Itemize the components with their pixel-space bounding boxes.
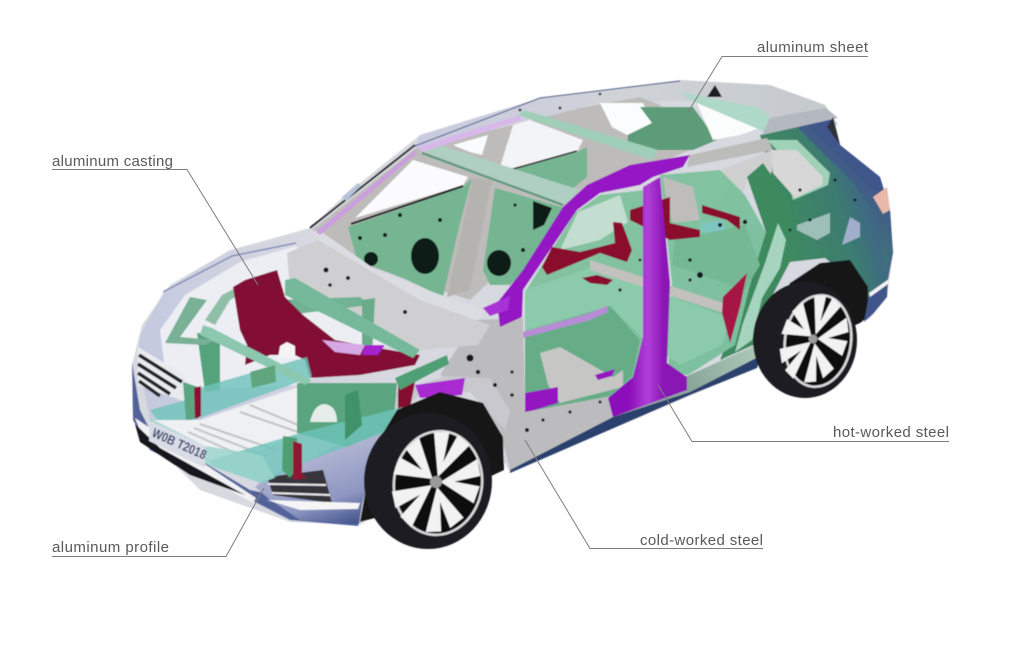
rear aluminum sheet strip — [680, 92, 782, 132]
label: cold-worked steel — [525, 440, 763, 549]
purple floor strip — [595, 369, 615, 380]
lower grille — [267, 470, 332, 503]
window slot — [533, 201, 552, 230]
white arch in frame — [310, 404, 337, 422]
white notch under casting — [278, 342, 295, 358]
rear side window interior — [770, 150, 823, 198]
cross member — [590, 260, 733, 316]
label: hot-worked steel: hot-worked steel — [833, 424, 949, 441]
label: aluminum profile — [52, 488, 264, 556]
c pillar — [722, 163, 793, 360]
lower beam — [210, 407, 403, 483]
far roof pale purple — [418, 115, 522, 152]
front hub — [430, 476, 442, 488]
purple patch at hinge — [483, 296, 510, 316]
rear side panel pale — [797, 213, 830, 240]
rear rim — [779, 291, 857, 391]
taillight — [873, 187, 890, 214]
far a pillar gray — [312, 97, 690, 300]
top cross bracket — [275, 297, 370, 316]
purple hot-worked steel — [316, 115, 690, 417]
front wheel — [360, 392, 504, 550]
b pillar — [608, 177, 687, 417]
body silhouette — [132, 80, 893, 525]
red in front well — [398, 382, 415, 412]
plate body — [149, 421, 205, 468]
c pillar highlight — [735, 223, 786, 352]
label: aluminum casting — [52, 153, 258, 285]
roof cross beam — [518, 110, 658, 160]
a pillar and roof rail — [497, 155, 690, 327]
far mirror — [342, 183, 361, 201]
front tunnel gray — [540, 347, 623, 403]
rear spokes — [764, 284, 863, 396]
cabin floor — [523, 170, 766, 413]
front rim — [387, 425, 489, 541]
bumper lower blue — [132, 362, 362, 526]
bumper bracket — [282, 436, 297, 478]
speaker hole small — [364, 252, 378, 266]
small far triangle window — [453, 135, 488, 155]
central front frame — [297, 383, 397, 447]
cross beam to grille — [200, 325, 312, 385]
gray rear roof rail — [687, 138, 773, 167]
label: aluminum sheet: aluminum sheet — [757, 39, 869, 56]
rear body green — [720, 117, 893, 360]
car illustration — [132, 80, 893, 550]
bumper bracket red — [293, 441, 307, 480]
header beam green edge — [422, 153, 563, 205]
floor ahead of b pillar — [525, 190, 648, 412]
purple behind engine — [322, 340, 365, 355]
far side structure — [312, 92, 782, 300]
far a pillar pale purple — [316, 150, 417, 235]
body hole dots — [324, 93, 856, 432]
upper bumper beam — [150, 357, 312, 420]
rear side window trim — [767, 140, 830, 200]
fender wheel surround — [390, 376, 510, 430]
arc to tower — [205, 278, 258, 325]
front green beams — [183, 278, 449, 480]
front tire — [364, 413, 492, 549]
green engine structures — [165, 278, 397, 447]
front face white chrome — [150, 385, 305, 460]
bumper white lip — [135, 418, 256, 503]
red engine casting — [233, 270, 420, 378]
speaker hole front door — [411, 238, 439, 274]
floor behind b pillar — [660, 170, 766, 375]
front bumper and fascia — [132, 347, 403, 526]
arch interior pale — [560, 195, 628, 250]
chrome stripes — [188, 405, 298, 462]
red mid casting — [542, 222, 632, 275]
strut right leg — [362, 298, 375, 358]
hood transparent panel — [138, 232, 470, 420]
left end beam — [150, 418, 275, 483]
far door front panel — [348, 178, 472, 297]
bumper black lip — [135, 424, 245, 495]
strip purple on footwell — [523, 306, 608, 338]
hood interior glass — [160, 246, 400, 390]
main diagonal beam — [285, 278, 420, 358]
grille — [138, 347, 186, 402]
label: aluminum profile: aluminum profile — [52, 539, 169, 556]
windshield edge dark — [310, 145, 415, 228]
left upright — [197, 333, 220, 392]
red rear tower — [702, 205, 740, 230]
chrome lip — [267, 500, 360, 510]
lower grille bars — [268, 484, 330, 495]
red aluminum casting rear — [542, 197, 747, 343]
label: hot-worked steel — [658, 385, 949, 442]
rear roof end — [762, 108, 838, 135]
purple floor plate — [525, 387, 558, 413]
far door top seal — [351, 186, 463, 224]
rear spoiler — [827, 117, 840, 145]
label: cold-worked steel: cold-worked steel — [640, 532, 763, 549]
far door rear panel — [483, 188, 565, 285]
sill strip — [612, 342, 763, 417]
rear wheel arch — [765, 260, 868, 350]
rear roof opening — [697, 103, 763, 140]
rear hub — [808, 334, 818, 344]
sill underside — [510, 355, 762, 473]
seat back gray — [663, 177, 700, 223]
label: aluminum sheet — [688, 39, 869, 112]
red right bracket — [722, 273, 747, 343]
roof antenna — [707, 85, 722, 97]
windshield header beam — [420, 143, 580, 204]
far windshield opening — [355, 160, 468, 218]
front side gray panel — [440, 318, 613, 470]
blue shoulder — [792, 117, 893, 272]
red floor spot — [582, 275, 613, 285]
rear mini strut — [250, 365, 276, 388]
front wheel arch — [360, 392, 504, 522]
label: aluminum casting: aluminum casting — [52, 153, 173, 170]
left arm — [165, 297, 215, 345]
rear wheel — [753, 260, 868, 398]
floor far panel dark — [672, 225, 760, 290]
interior floor panel light — [525, 268, 730, 365]
front footwell green — [525, 306, 640, 412]
purple in wheel well — [415, 378, 465, 398]
purple under cowl — [362, 345, 385, 355]
rear quarter structure — [687, 108, 893, 360]
roof edge line — [415, 81, 680, 146]
grille bars — [138, 355, 182, 396]
transverse upper front — [395, 355, 449, 390]
front spokes — [373, 418, 498, 550]
green arm inside frame — [345, 390, 362, 440]
rear bumper blue — [864, 282, 888, 322]
teal block rear — [700, 220, 725, 233]
far quarter window — [600, 103, 652, 135]
far rear seal — [513, 151, 577, 169]
teal aluminum profiles — [150, 357, 403, 483]
far roof green panel — [627, 107, 717, 150]
plate text: W0B T2018 — [150, 425, 209, 462]
rear tire — [753, 282, 857, 398]
side fascia — [255, 407, 403, 524]
licence plate — [149, 421, 209, 468]
far b pillar — [447, 178, 492, 297]
engine bay firewall — [287, 240, 490, 350]
left bracket red — [194, 386, 201, 419]
red rear seat bracket — [630, 197, 700, 240]
left bracket — [183, 382, 199, 420]
gray inner pillar — [720, 150, 772, 196]
rear side panel blue — [842, 217, 860, 245]
roof panel — [415, 80, 838, 148]
far door lower window panel — [510, 147, 587, 193]
hood edge line — [163, 243, 296, 292]
windshield cowl band — [310, 230, 483, 322]
far rear window — [500, 120, 583, 168]
rear bumper strip — [869, 279, 889, 297]
speaker hole rear door — [487, 250, 511, 276]
